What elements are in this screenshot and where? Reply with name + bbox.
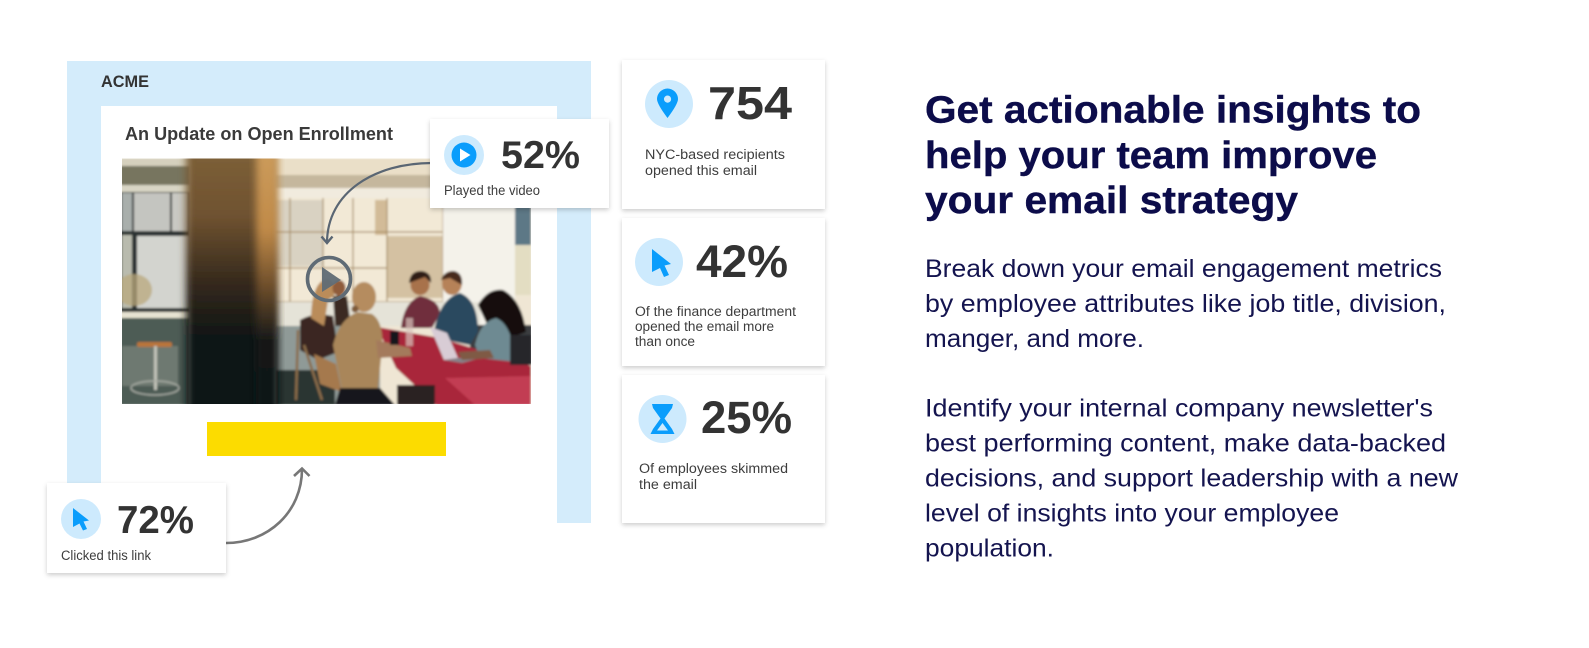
heading: Get actionable insights to [925,90,1421,132]
cup and glasses [390,331,399,345]
text block: newsletter paragraph: decisions, and support leadership with a new [925,464,1459,492]
heading: help your team improve [925,135,1377,177]
caption: the email [639,477,697,492]
woman curly dark hair [478,290,526,338]
red table [377,327,531,405]
brand name: ACME [101,73,149,91]
stat: 42% [696,236,788,287]
photo: team meeting at red table [116,150,532,415]
panel: email body [101,106,557,648]
caption: Played the video [444,183,540,198]
card: NYC recipients [622,60,825,209]
email title: An Update on Open Enrollment [125,124,393,144]
arrow: played video to play button [322,163,432,243]
man with curly hair [410,275,430,295]
icon: video play button on photo [308,258,350,300]
stat: 52% [501,134,580,177]
chairs [296,330,322,400]
heading [925,90,1421,222]
text block: newsletter paragraph: Identify your internal company newsletter's [925,394,1433,422]
card: employees skimmed [622,375,825,523]
left window side [122,316,190,404]
laptop [430,327,458,360]
text block: metrics paragraph: manger, and more. [925,325,1144,353]
caption: opened this email [645,163,757,178]
stat: 25% [701,392,792,443]
caption [635,304,796,349]
icon: play circle [444,135,484,175]
text block: newsletter paragraph: best performing content, make data-backed [925,430,1446,458]
heading: your email strategy [925,180,1298,222]
text block: newsletter paragraph: population. [925,534,1054,562]
caption: than once [635,334,695,349]
text block: metrics paragraph: by employee attributes like job title, division, [925,290,1446,318]
icon: cursor [635,238,683,286]
man at back left [332,280,346,296]
stat: 72% [117,499,194,542]
card: finance department [622,218,825,366]
right side dark lower [468,324,531,351]
card: clicked this link [47,483,226,573]
stat: 754 [708,77,792,129]
text block: metrics paragraph: Break down your email engagement metrics [925,255,1442,283]
callout button: yellow link [207,422,446,456]
caption: opened the email more [635,319,774,334]
woman tan shirt [333,312,382,390]
panel: email background [67,61,591,523]
caption [639,461,788,492]
icon: hourglass [638,395,686,443]
woman blonde left [300,315,338,360]
arrow: clicked link to button [226,468,310,543]
icon: map pin [645,80,693,128]
man in blue shirt [442,271,462,295]
caption: Clicked this link [61,548,151,563]
caption: Of the finance department [635,304,796,319]
card: played the video [430,119,609,208]
text block: newsletter paragraph: level of insights into your employee [925,500,1339,528]
caption: NYC-based recipients [645,147,785,162]
text block: newsletter paragraph [925,394,1459,562]
text block: metrics paragraph [925,255,1446,353]
pillar [186,150,274,415]
right windows [280,158,430,174]
caption [645,147,785,178]
caption: Of employees skimmed [639,461,788,476]
icon: cursor [61,499,101,539]
